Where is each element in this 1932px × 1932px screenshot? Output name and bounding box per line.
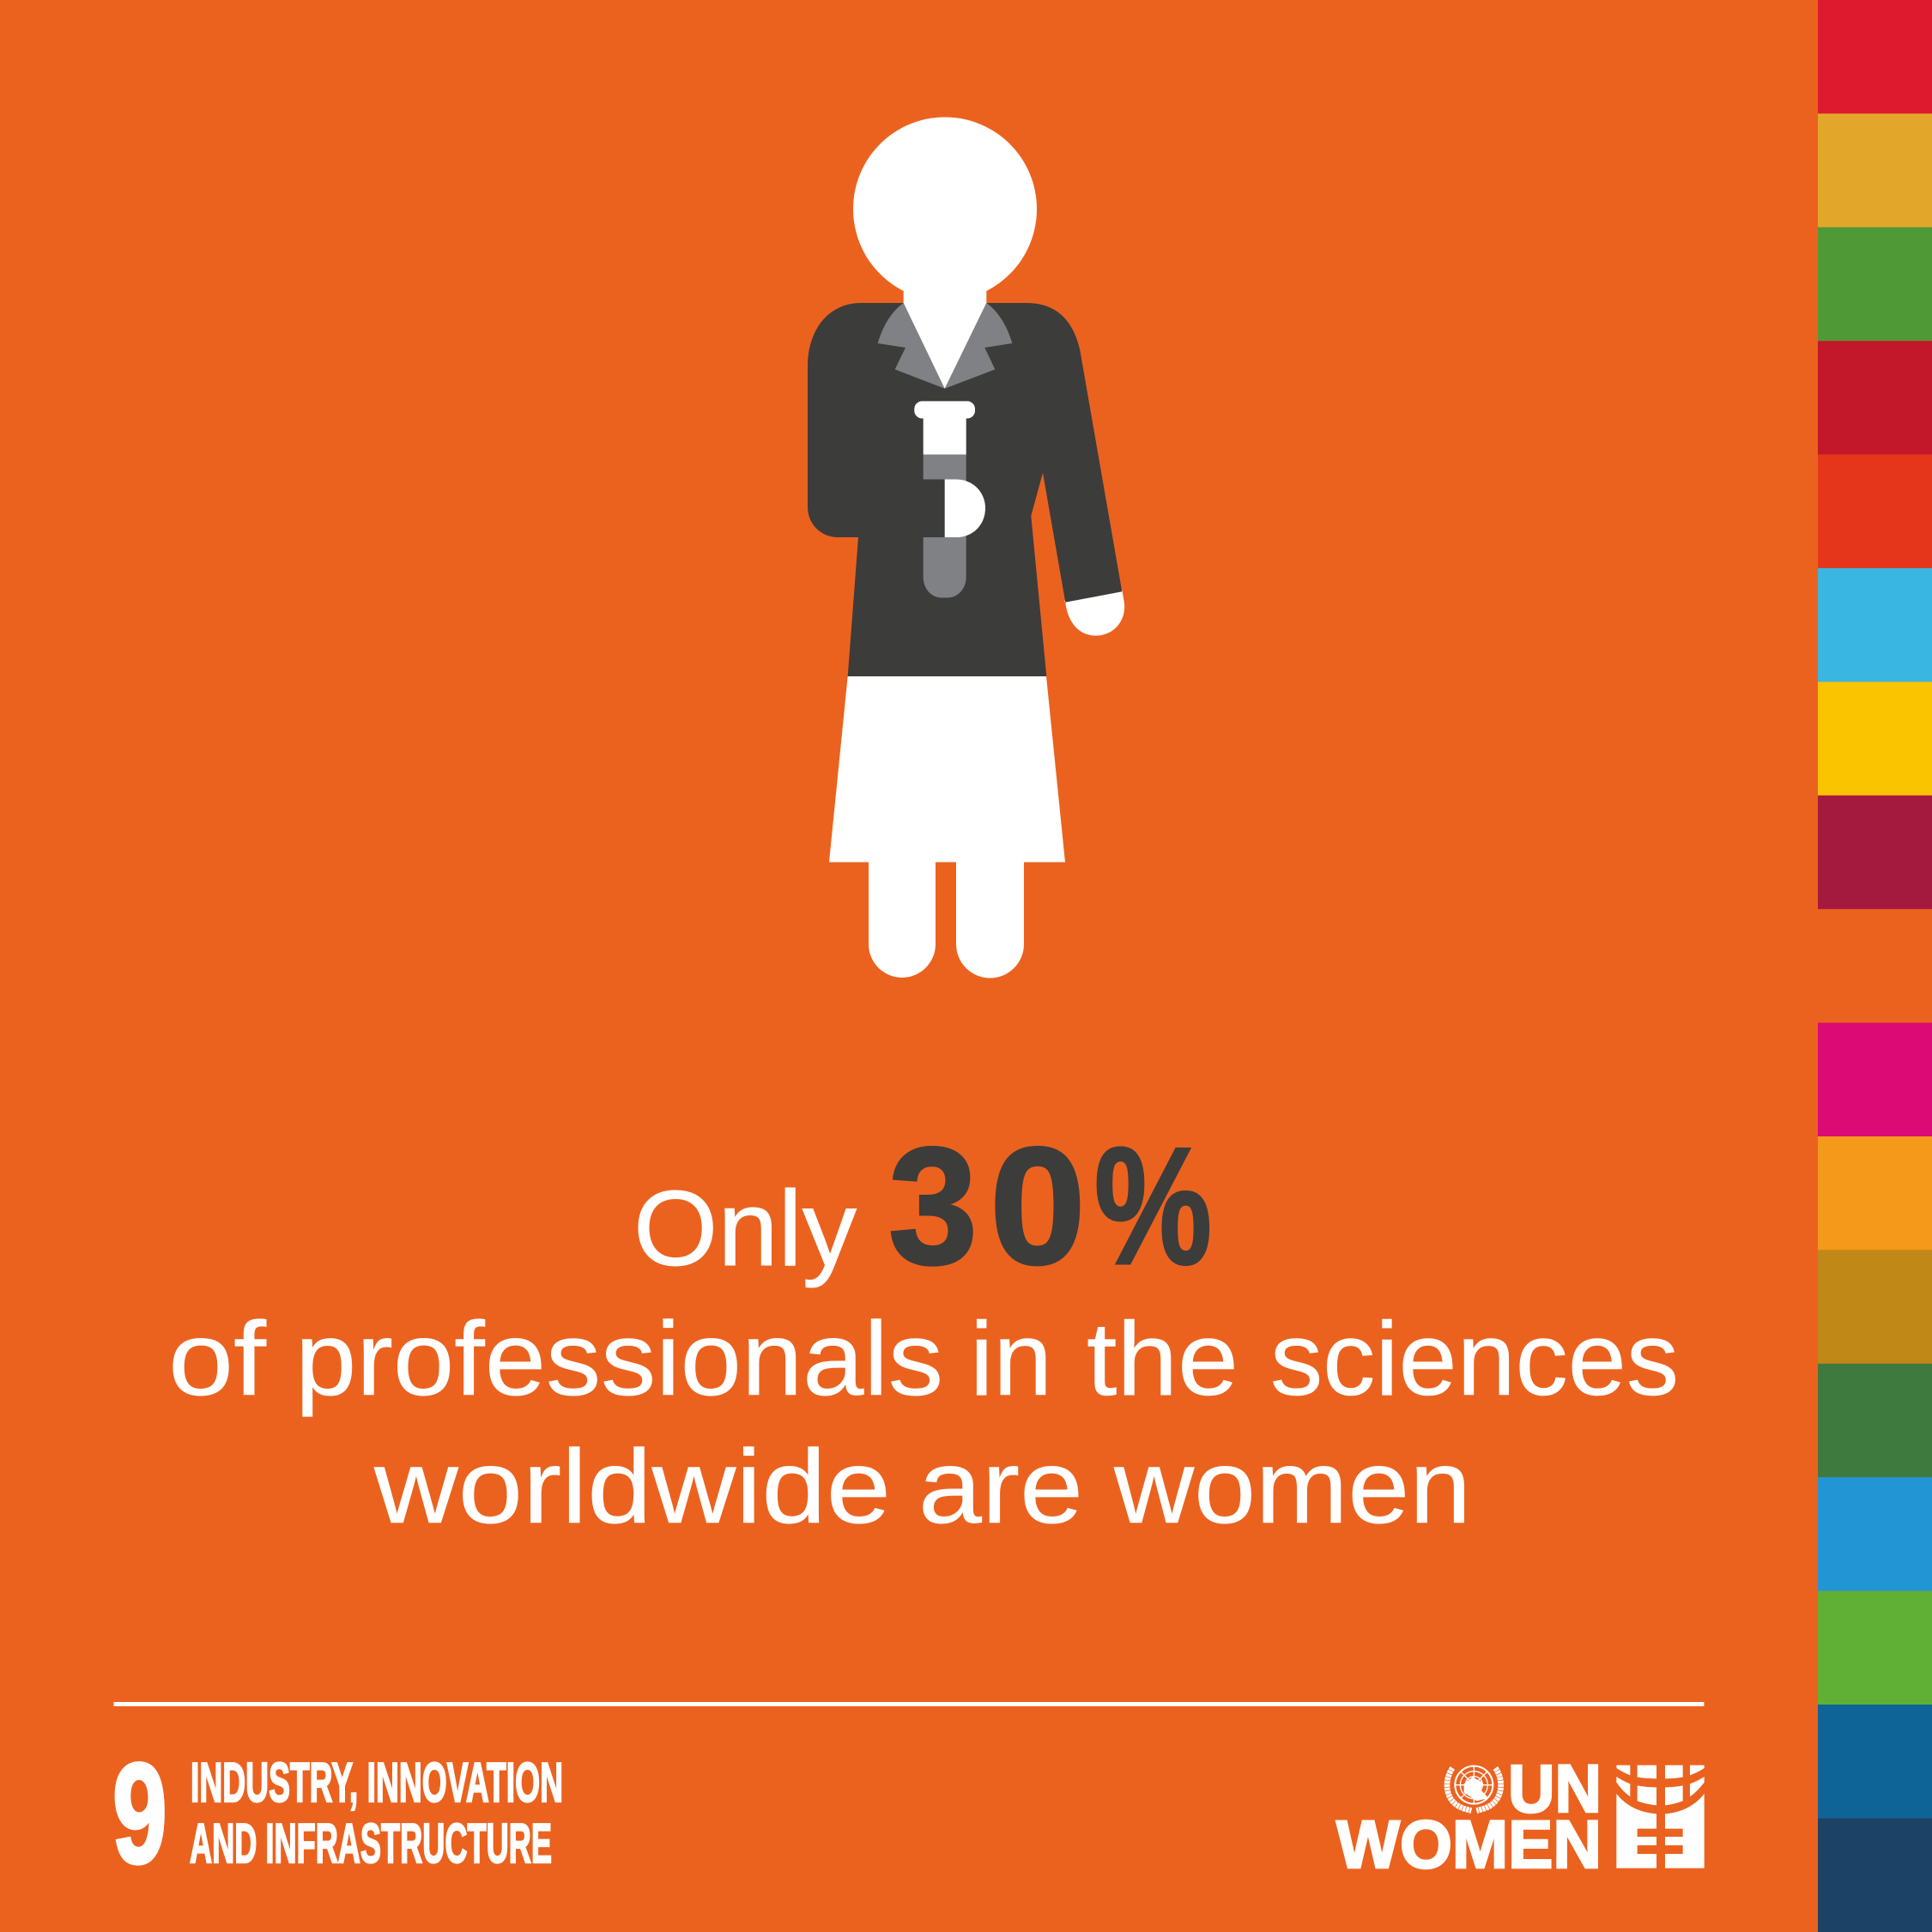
icon: woman scientist holding a test tube bbox=[808, 117, 1124, 978]
statistic: 30%: % bbox=[1094, 1113, 1212, 1299]
headline line 2 bbox=[168, 1300, 1679, 1417]
headline line 3 bbox=[373, 1428, 1471, 1545]
statistic: 30%: 0 bbox=[990, 1113, 1086, 1299]
headline line 2: the bbox=[1087, 1300, 1239, 1417]
footer divider bbox=[113, 1702, 1705, 1706]
wordmark: UN: UN bbox=[1508, 1750, 1602, 1826]
headline line 3: women bbox=[1113, 1428, 1471, 1545]
statistic: 30% bbox=[888, 1113, 1212, 1299]
headline line 3: are bbox=[918, 1428, 1083, 1545]
head and neck bbox=[853, 117, 1037, 389]
wordmark: WOMEN: WOMEN bbox=[1336, 1806, 1602, 1882]
headline line 2: in bbox=[970, 1300, 1052, 1417]
icon: UN emblem bbox=[1447, 1766, 1501, 1811]
goal title bbox=[190, 1751, 563, 1874]
headline line 3: worldwide bbox=[373, 1428, 891, 1545]
text: Only: Only bbox=[633, 1170, 857, 1288]
goal title line 1: INDUSTRY, INNOVATION bbox=[191, 1751, 563, 1814]
jacket bbox=[808, 303, 1122, 676]
right hand bbox=[1064, 590, 1124, 636]
headline line 1 bbox=[633, 1113, 1212, 1299]
lapels bbox=[878, 303, 1012, 389]
goal number 9: 9 bbox=[112, 1735, 167, 1893]
test tube bbox=[914, 401, 975, 597]
holding arm and hand bbox=[910, 479, 985, 537]
headline line 2: of bbox=[168, 1300, 267, 1417]
goal title line 2: AND INFRASTRUCTURE bbox=[190, 1812, 552, 1874]
icon: UN Women globe symbol bbox=[1616, 1765, 1705, 1868]
statistic: 30%: 3 bbox=[888, 1113, 978, 1299]
headline line 2: professionals bbox=[295, 1300, 943, 1417]
panel: SDG colour strip bbox=[1818, 0, 1932, 1932]
logo: UN Women bbox=[1336, 1750, 1705, 1882]
skirt and legs bbox=[829, 676, 1065, 978]
headline line 2: sciences bbox=[1270, 1300, 1679, 1417]
